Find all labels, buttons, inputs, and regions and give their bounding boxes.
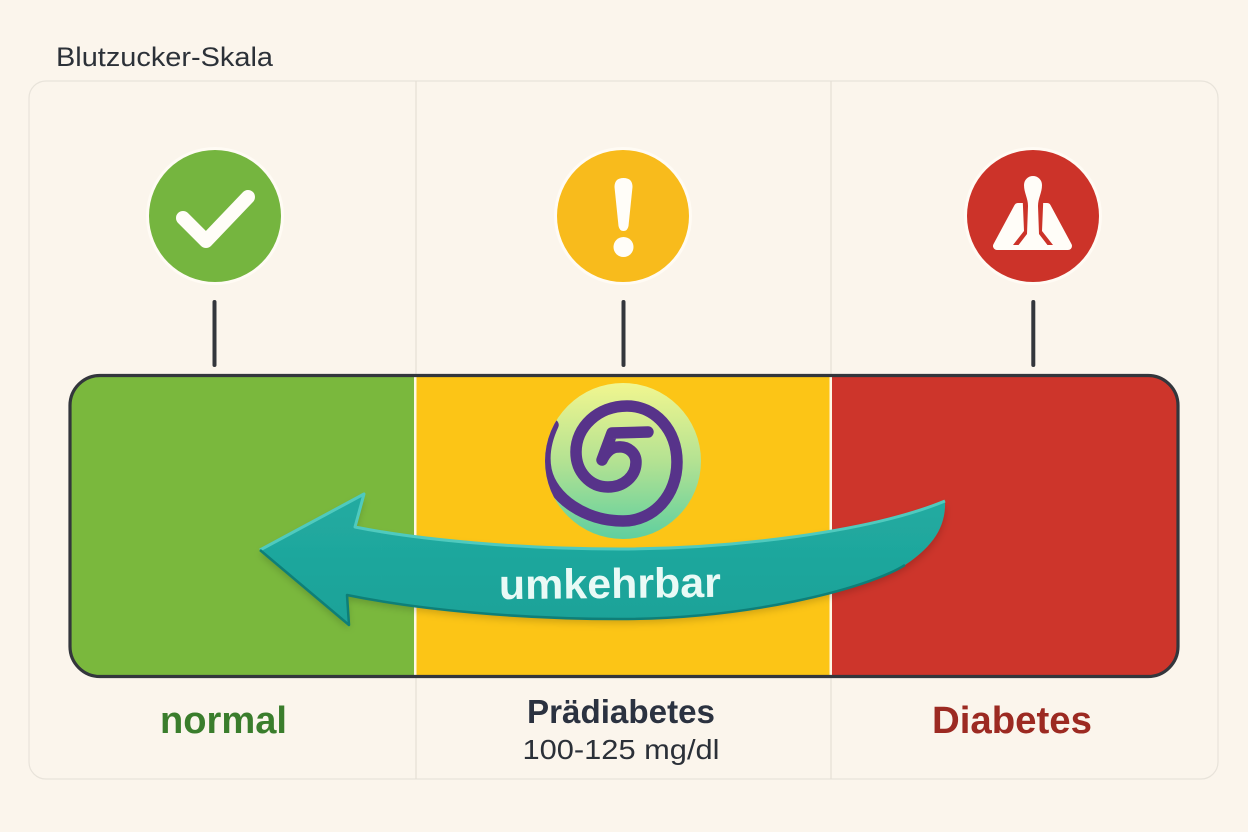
title: Blutzucker-Skala <box>56 42 274 72</box>
label: Prädiabetes with range: 100-125 mg/dl <box>522 734 720 765</box>
arrow lower edge <box>260 550 905 625</box>
panel: scale frame <box>29 81 1218 779</box>
icon: yellow exclamation mark <box>554 147 692 285</box>
icon: red warning triangle <box>964 147 1102 285</box>
label: Prädiabetes with range <box>522 693 720 765</box>
zone: Diabetes <box>831 375 1178 677</box>
logo: spiral five <box>545 383 701 539</box>
connector: normal <box>212 302 216 365</box>
label: Diabetes: Diabetes <box>932 700 1092 742</box>
label: Prädiabetes with range: Prädiabetes <box>527 693 715 730</box>
zone: normal <box>70 375 415 677</box>
arrow highlight <box>260 494 945 550</box>
scale bar <box>70 375 1178 677</box>
connector: Prädiabetes <box>622 302 626 365</box>
arrow label: umkehrbar <box>499 559 721 608</box>
arrow: umkehrbar <box>260 494 945 625</box>
label: normal: normal <box>160 700 287 742</box>
connector: Diabetes <box>1031 302 1035 365</box>
zone: Prädiabetes <box>415 375 831 677</box>
icon: green check <box>146 147 284 285</box>
